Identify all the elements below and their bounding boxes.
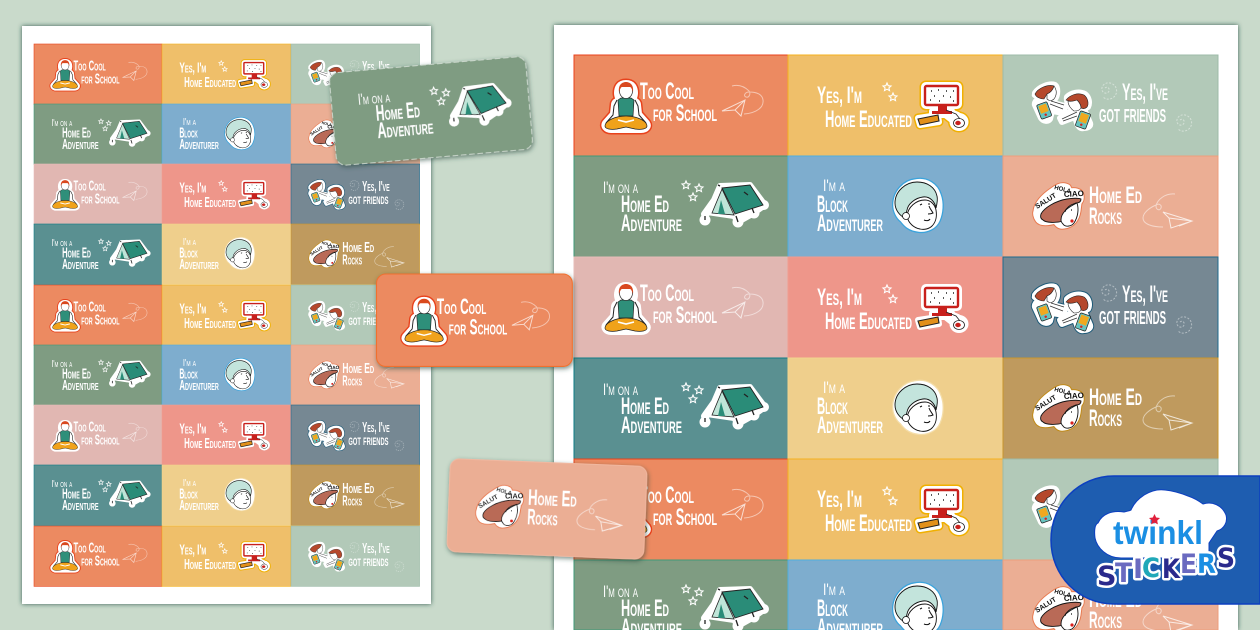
sticker: Adventure teal: Adventure xyxy=(621,412,682,439)
callout: loose sticker Home Ed Adventure xyxy=(329,56,533,166)
small sticker: Adventure row 8: Adventure xyxy=(62,498,99,514)
small sticker: Home Ed Rocks tan: Home Ed xyxy=(342,240,374,256)
sticker: Block cream xyxy=(788,358,1003,459)
small sticker: Too Cool for School: for School xyxy=(81,71,120,87)
small sticker: Adventure row 6: I'm on a xyxy=(51,359,72,370)
logo word stickers xyxy=(1097,543,1235,592)
sticker: Home Educated salmon: Yes, I'm xyxy=(817,284,862,311)
small sticker: Adventure row 6 xyxy=(34,345,162,405)
logo badge xyxy=(1051,476,1260,604)
small sticker: I'm on a Home Ed Adventure xyxy=(34,104,162,164)
sticker: got friends row 5: got friends xyxy=(1099,502,1166,532)
small sticker: Block row 8 xyxy=(162,465,291,525)
sticker: Too Cool for School: Too Cool xyxy=(640,78,694,105)
sticker: got friends row 5 xyxy=(1003,459,1218,560)
small sticker: Rocks row 8: Home Ed xyxy=(342,481,374,497)
sticker: Adventure teal: I'm on a xyxy=(603,380,638,399)
sticker: Home Ed Rocks: Rocks xyxy=(1089,203,1122,230)
sticker: Home Ed Rocks: Home Ed xyxy=(1089,182,1142,209)
small sticker: got friends row 9 xyxy=(291,526,420,586)
small sticker: Home Educated row 7: Home Educated xyxy=(184,436,236,452)
logo word stickers: T xyxy=(1115,558,1133,589)
small sticker: Too Cool row 5 xyxy=(34,285,162,345)
small sticker: Home Ed Rocks tan: Rocks xyxy=(342,253,362,269)
small sticker: Home Educated row 9: Yes, I'm xyxy=(179,543,206,559)
small sticker: Too Cool for School xyxy=(34,44,162,104)
small sticker: Home Educated row 5: Yes, I'm xyxy=(179,302,206,318)
sticker: Home Educated salmon: Home Educated xyxy=(825,308,912,335)
small sticker: Yes, I'm Home Educated salmon: Yes, I'm xyxy=(179,181,206,197)
small sticker: I'm a Block Adventurer: Block xyxy=(179,125,198,141)
small sticker: Block Adventurer cream xyxy=(162,224,291,284)
small sticker: Block row 8: Block xyxy=(179,486,198,502)
sticker: Rocks tan: Home Ed xyxy=(1089,384,1142,411)
logo word stickers: S xyxy=(1097,561,1116,592)
small sticker: Adventure row 6: Adventure xyxy=(62,378,99,394)
sticker: Too Cool pink: Too Cool xyxy=(640,280,694,307)
callout: loose sticker Home Ed Adventure: Adventure xyxy=(376,113,434,143)
small sticker: Adventure row 8 xyxy=(34,465,162,525)
logo word stickers: I xyxy=(1133,554,1143,585)
sticker: Home Educated row 5 xyxy=(788,459,1003,560)
small sticker: I'm a Block Adventurer: I'm a xyxy=(183,117,196,128)
sticker: I'm on a Home Ed Adventure xyxy=(574,156,788,257)
panel: small sticker sheet xyxy=(22,26,431,604)
small sticker: Home Educated row 5 xyxy=(162,285,291,345)
small sticker: Yes, I've got friends: got friends xyxy=(348,71,388,88)
small sticker: I'm on a Home Ed Adventure: Adventure xyxy=(62,137,99,153)
sticker: Block cream: Adventurer xyxy=(817,412,883,439)
small sticker: Rocks row 6 xyxy=(291,345,420,405)
small sticker: got friends row 9: got friends xyxy=(348,553,388,570)
small sticker: Block Adventurer cream: Adventurer xyxy=(179,257,219,273)
small sticker: got friends row 9: Yes, I've xyxy=(362,541,390,557)
small sticker: I'm on a Home Ed Adventure: Home Ed xyxy=(62,125,91,141)
sticker: Yes, I'm Home Educated xyxy=(788,55,1003,156)
sticker: Yes, I've got friends xyxy=(1003,55,1218,156)
sticker: Adventure teal: Home Ed xyxy=(621,393,669,420)
small sticker: I'm a Block Adventurer xyxy=(162,104,291,164)
small sticker: Too Cool row 7: for School xyxy=(81,432,120,448)
logo word stickers: R xyxy=(1197,549,1216,580)
logo cloud xyxy=(1095,490,1227,558)
small sticker: Rocks row 8: Rocks xyxy=(342,494,362,510)
small sticker: Block row 8: I'm a xyxy=(183,478,196,489)
sticker: Too Cool row 5: Too Cool xyxy=(640,482,694,509)
small sticker: Block row 6: I'm a xyxy=(183,358,196,369)
sticker: Yes, I've got friends: Yes, I've xyxy=(1122,79,1168,106)
small sticker: Yes, I've got friends slate: got friends xyxy=(348,191,388,208)
small sticker: Home Ed Adventure teal: Adventure xyxy=(62,257,99,273)
small sticker: got friends row 5: got friends xyxy=(348,312,388,329)
logo word stickers: E xyxy=(1180,549,1197,580)
sticker: got friends slate: got friends xyxy=(1099,300,1166,330)
small sticker: Yes, I'm Home Educated: Home Educated xyxy=(184,75,236,91)
small sticker: got friends row 7: Yes, I've xyxy=(362,420,390,436)
small sticker: Home Ed Adventure teal: I'm on a xyxy=(51,238,72,249)
sticker: Adventure row 6: I'm on a xyxy=(603,582,638,601)
small sticker: Rocks row 6: Rocks xyxy=(342,374,362,390)
sticker: got friends slate xyxy=(1003,257,1218,358)
sticker: Home Educated row 5: Home Educated xyxy=(825,510,912,537)
small sticker: Block row 6: Block xyxy=(179,366,198,382)
large sheet paper xyxy=(554,25,1238,630)
panel: large sticker sheet xyxy=(554,25,1238,630)
sticker: Too Cool pink xyxy=(574,257,788,358)
small sticker: Too Cool for School pink xyxy=(34,164,162,224)
sticker: Too Cool pink: for School xyxy=(653,302,717,329)
small sticker: Yes, I'm Home Educated salmon xyxy=(162,164,291,224)
sticker: Home Educated row 5: Yes, I'm xyxy=(817,486,862,513)
sticker: I'm on a Home Ed Adventure: Adventure xyxy=(621,210,682,237)
callout: loose sticker Home Ed Adventure: I'm on a xyxy=(357,89,391,109)
small sticker: Adventure row 6: Home Ed xyxy=(62,366,91,382)
small sticker: Yes, I've got friends xyxy=(291,44,420,104)
small sticker: Too Cool row 5: for School xyxy=(81,312,120,328)
small sticker: Home Ed Adventure teal: Home Ed xyxy=(62,245,91,261)
sticker: Too Cool row 5: for School xyxy=(653,504,717,531)
small sticker: Block Adventurer cream: I'm a xyxy=(183,237,196,248)
callout: loose sticker Home Ed Adventure: Home Ed xyxy=(375,97,421,126)
callout: loose sticker Too Cool for School xyxy=(376,274,572,366)
small sticker: Too Cool for School pink: Too Cool xyxy=(73,178,106,194)
sticker: Rocks row 6 xyxy=(1003,560,1218,630)
small sticker: Adventure row 8: Home Ed xyxy=(62,486,91,502)
small sticker: Too Cool row 9 xyxy=(34,526,162,586)
sticker: Rocks tan: Rocks xyxy=(1089,405,1122,432)
small sticker: Yes, I've got friends: Yes, I've xyxy=(362,59,390,75)
small sticker: Yes, I've got friends slate xyxy=(291,164,420,224)
sticker: Adventure row 6 xyxy=(574,560,788,630)
logo: Twinkl Stickers xyxy=(1051,476,1260,604)
small sticker: Home Educated row 9 xyxy=(162,526,291,586)
sticker: Too Cool for School xyxy=(574,55,788,156)
small sticker: Home Ed Rocks xyxy=(291,104,420,164)
logo word twinkl: twinkl xyxy=(1113,514,1203,551)
small sticker: Too Cool row 5: Too Cool xyxy=(73,299,106,315)
sticker: got friends row 5: Yes, I've xyxy=(1122,483,1168,510)
small sticker: Adventure row 8: I'm on a xyxy=(51,479,72,490)
sticker: Adventure teal xyxy=(574,358,788,459)
sticker: I'm a Block Adventurer: Block xyxy=(817,191,848,218)
sticker: Rocks tan xyxy=(1003,358,1218,459)
sticker: I'm on a Home Ed Adventure: Home Ed xyxy=(621,191,669,218)
sticker: I'm a Block Adventurer: I'm a xyxy=(823,176,845,195)
small sticker: Block row 6 xyxy=(162,345,291,405)
small sticker: got friends row 7: got friends xyxy=(348,432,388,449)
small sticker: Block row 6: Adventurer xyxy=(179,378,219,394)
small sticker: Home Educated row 9: Home Educated xyxy=(184,557,236,573)
small sticker: Too Cool row 9: Too Cool xyxy=(73,540,106,556)
small sticker: Home Educated row 7: Yes, I'm xyxy=(179,422,206,438)
small sticker: Too Cool for School pink: for School xyxy=(81,191,120,207)
logo word stickers: S xyxy=(1217,543,1235,574)
small sticker: Too Cool row 7 xyxy=(34,405,162,465)
small sticker: Yes, I'm Home Educated salmon: Home Educated xyxy=(184,195,236,211)
callout: loose sticker Too Cool for School: Too Cool xyxy=(437,294,486,319)
small sheet paper xyxy=(22,26,431,604)
sticker: I'm on a Home Ed Adventure: I'm on a xyxy=(603,178,638,197)
small sticker: Home Ed Rocks tan xyxy=(291,224,420,284)
small sticker: Block Adventurer cream: Block xyxy=(179,245,198,261)
small sticker: got friends row 5 xyxy=(291,285,420,345)
small sticker: Too Cool row 7: Too Cool xyxy=(73,419,106,435)
sticker: Block row 6: Block xyxy=(817,595,848,622)
sticker: Block row 6: I'm a xyxy=(823,580,845,599)
small sticker: Rocks row 8 xyxy=(291,465,420,525)
small sticker: Home Ed Rocks: Rocks xyxy=(342,133,362,149)
sticker: Home Ed Rocks xyxy=(1003,156,1218,257)
small sticker: got friends row 5: Yes, I've xyxy=(362,300,390,316)
sticker: got friends slate: Yes, I've xyxy=(1122,281,1168,308)
small sticker: Home Ed Rocks: Home Ed xyxy=(342,120,374,136)
sticker: Yes, I've got friends: got friends xyxy=(1099,98,1166,128)
sticker: I'm a Block Adventurer xyxy=(788,156,1003,257)
small sticker: Home Ed Adventure teal xyxy=(34,224,162,284)
sticker: Too Cool for School: for School xyxy=(653,100,717,127)
small sticker: Yes, I'm Home Educated: Yes, I'm xyxy=(179,61,206,77)
small sticker: Yes, I'm Home Educated xyxy=(162,44,291,104)
sticker: Yes, I'm Home Educated: Home Educated xyxy=(825,106,912,133)
callout: loose sticker Home Ed Rocks: Rocks xyxy=(527,504,558,531)
small sticker: Too Cool row 9: for School xyxy=(81,553,120,569)
small sticker: I'm a Block Adventurer: Adventurer xyxy=(179,137,219,153)
small sticker: I'm on a Home Ed Adventure: I'm on a xyxy=(51,118,72,129)
sticker: Block cream: I'm a xyxy=(823,378,845,397)
small sticker: Rocks row 6: Home Ed xyxy=(342,361,374,377)
logo word stickers: C xyxy=(1142,553,1160,584)
small sticker: Block row 8: Adventurer xyxy=(179,498,219,514)
sticker: I'm a Block Adventurer: Adventurer xyxy=(817,210,883,237)
callout: loose sticker Home Ed Rocks: Home Ed xyxy=(528,485,577,512)
small sticker: Yes, I've got friends slate: Yes, I've xyxy=(362,179,390,195)
sticker: Yes, I'm Home Educated: Yes, I'm xyxy=(817,82,862,109)
sticker: Adventure row 6: Home Ed xyxy=(621,595,669,622)
sticker: Block cream: Block xyxy=(817,393,848,420)
callout: loose sticker Home Ed Rocks xyxy=(447,459,647,559)
sticker: Block row 6 xyxy=(788,560,1003,630)
sticker: Too Cool row 5 xyxy=(574,459,788,560)
small sticker: Home Educated row 7 xyxy=(162,405,291,465)
small sticker: Home Educated row 5: Home Educated xyxy=(184,316,236,332)
small sticker: got friends row 7 xyxy=(291,405,420,465)
callout: loose sticker Too Cool for School: for School xyxy=(449,314,507,339)
small sticker: Too Cool for School: Too Cool xyxy=(73,58,106,74)
sticker: Rocks row 6: Home Ed xyxy=(1089,586,1142,613)
logo word stickers: K xyxy=(1162,554,1181,585)
logo star xyxy=(1149,514,1160,524)
sticker: Home Educated salmon xyxy=(788,257,1003,358)
